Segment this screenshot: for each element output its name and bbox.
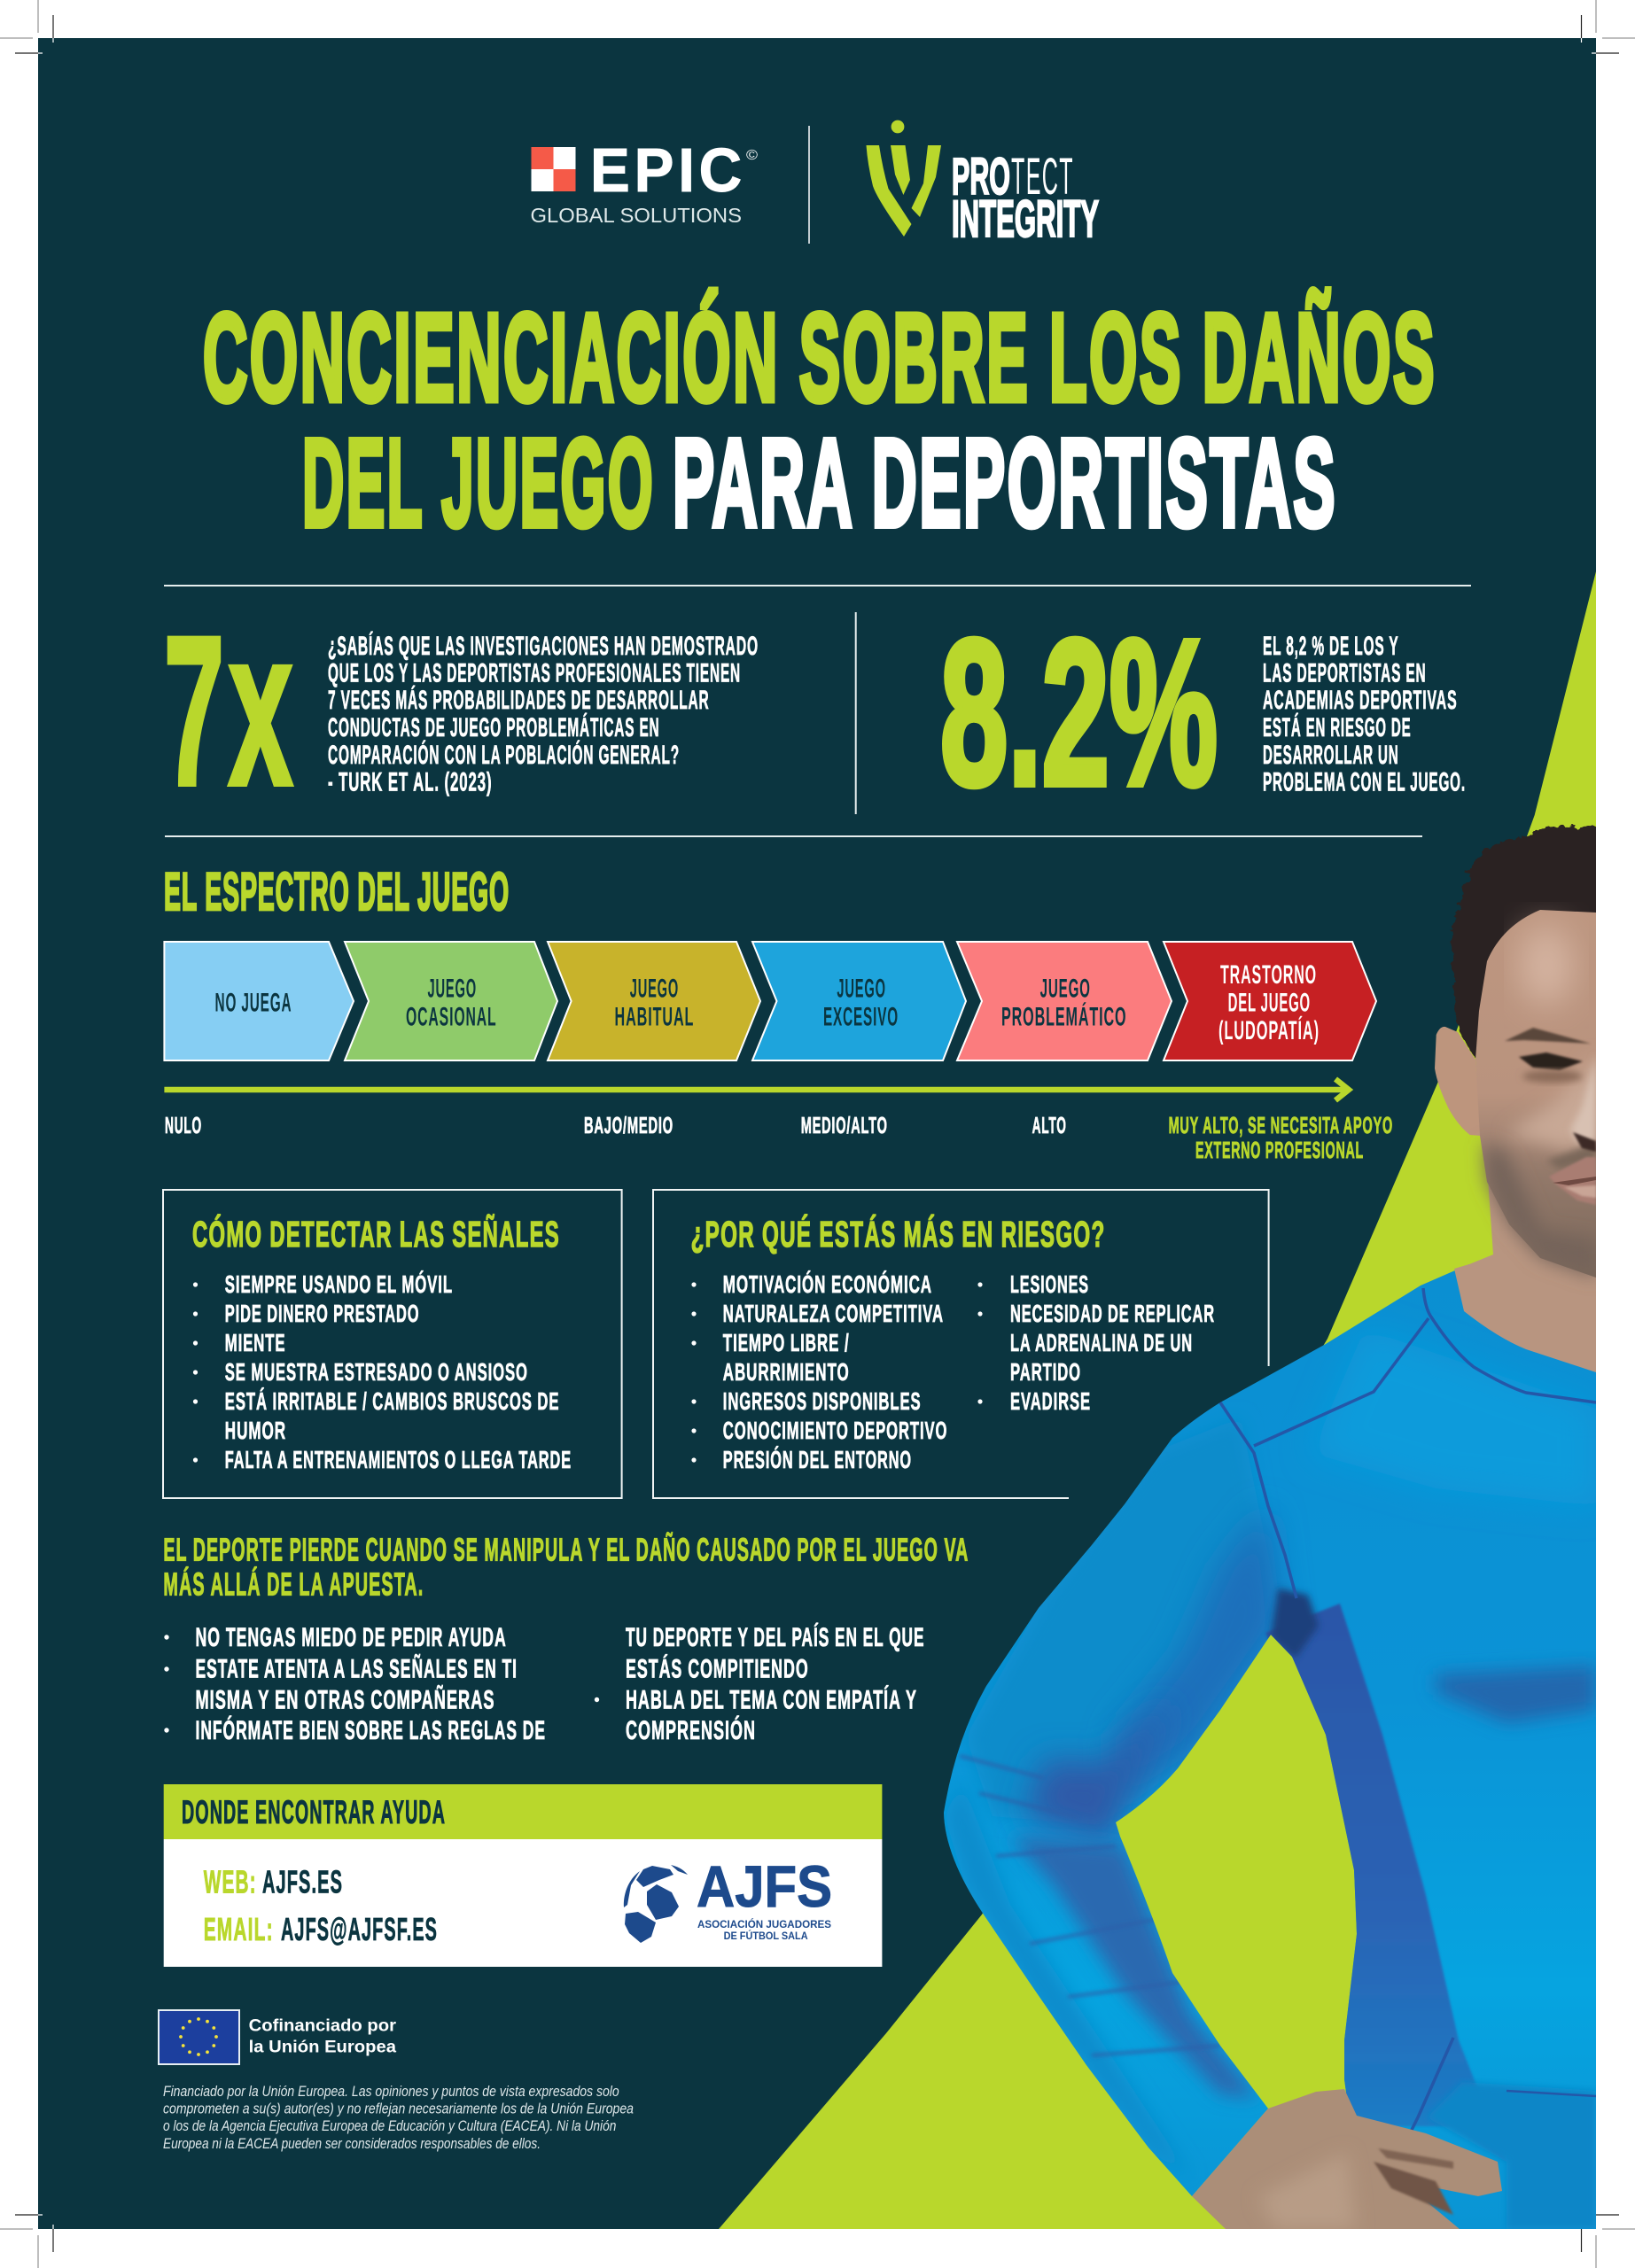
- statement heading: MÁS ALLÁ DE LA APUESTA.: [163, 1566, 424, 1602]
- icon: EPIC red and white square: [532, 147, 576, 191]
- web contact: [204, 1864, 343, 1899]
- bullet list: ESTÁ IRRITABLE / CAMBIOS BRUSCOS DE: [225, 1387, 559, 1415]
- disclaimer: o los de la Agencia Ejecutiva Europea de Educación y Cultura (EACEA). Ni la Unión: [163, 2117, 616, 2134]
- chevron: juego excesivo: [752, 942, 966, 1060]
- advice list: left column: MISMA Y EN OTRAS COMPAÑERAS: [195, 1685, 494, 1715]
- arrow: risk scale: [164, 1079, 1349, 1100]
- bullet list: first column: MOTIVACIÓN ECONÓMICA: [723, 1270, 932, 1298]
- green diagonal background shape: [719, 571, 1596, 2229]
- chevron: trastorno del juego: [1164, 942, 1376, 1060]
- big number 7x: x: [229, 584, 292, 831]
- web contact: AJFS.ES: [262, 1864, 343, 1899]
- EPIC wordmark: EPIC: [590, 136, 746, 205]
- stat description: [328, 631, 759, 797]
- risk level labels: BAJO/MEDIO: [584, 1114, 673, 1138]
- stat description: EL 8,2 % DE LOS Y: [1263, 632, 1398, 661]
- logo: European Union co-funding: [159, 2010, 397, 2064]
- bullet list: second column: [977, 1270, 1215, 1415]
- bullet list: first column: [691, 1270, 947, 1473]
- panel: where to find help: [164, 1784, 882, 1967]
- email contact: [204, 1911, 438, 1947]
- eyebrow: [1505, 1028, 1591, 1044]
- chevron: juego problematico: PROBLEMÁTICO: [1001, 1001, 1127, 1031]
- chevron: no juega: NO JUEGA: [214, 989, 292, 1017]
- statement heading: [163, 1531, 969, 1602]
- chevron: juego excesivo: JUEGO: [837, 975, 886, 1003]
- stat description: [1263, 632, 1466, 797]
- neck: [1454, 1178, 1596, 1372]
- chevron: trastorno del juego: (LUDOPATÍA): [1218, 1015, 1320, 1045]
- chevron: juego ocasional: JUEGO: [427, 975, 477, 1003]
- risk level labels: NULO: [165, 1114, 202, 1138]
- panel heading: DONDE ENCONTRAR AYUDA: [182, 1794, 446, 1830]
- disclaimer: [163, 2083, 634, 2152]
- chevron: juego problematico: [957, 942, 1172, 1060]
- risk level labels: [165, 1114, 1393, 1163]
- disclaimer: comprometen a su(s) autor(es) y no reflejan necesariamente los de la Unión Europea: [163, 2101, 634, 2117]
- logo: AJFS: [624, 1853, 832, 1943]
- shirt seams: [1220, 1288, 1596, 2135]
- chevron: juego ocasional: [345, 942, 557, 1060]
- stat description: COMPARACIÓN CON LA POBLACIÓN GENERAL?: [328, 740, 680, 770]
- co-funding text: la Unión Europea: [249, 2039, 396, 2057]
- bullet list: SIEMPRE USANDO EL MÓVIL: [225, 1270, 453, 1298]
- panel header bar: [164, 1784, 882, 1839]
- email contact: AJFS@AJFSF.ES: [281, 1911, 438, 1947]
- risk level labels: MEDIO/ALTO: [801, 1114, 888, 1138]
- logo: EPIC Global Solutions: [530, 136, 758, 227]
- logo: Protect Integrity: TECT: [1011, 148, 1074, 206]
- copyright mark: ©: [746, 148, 758, 163]
- panel white body: [164, 1839, 882, 1967]
- logo: Protect Integrity: [867, 120, 1099, 248]
- advice list: right column: COMPRENSIÓN: [626, 1715, 756, 1745]
- stat description: DESARROLLAR UN: [1263, 741, 1398, 770]
- stat description: CONDUCTAS DE JUEGO PROBLEMÁTICAS EN: [328, 712, 659, 742]
- advice list: right column: [595, 1622, 925, 1745]
- bullet list: first column: PRESIÓN DEL ENTORNO: [723, 1446, 912, 1473]
- advice list: right column: ESTÁS COMPITIENDO: [626, 1653, 809, 1683]
- hair: [1452, 826, 1608, 1060]
- risk level labels: ALTO: [1032, 1114, 1067, 1138]
- web contact: WEB:: [204, 1864, 257, 1899]
- co-funding text: Cofinanciado por: [249, 2017, 397, 2036]
- bullet list: first column: NATURALEZA COMPETITIVA: [723, 1300, 944, 1327]
- ear: [1435, 1027, 1481, 1136]
- bullet list: second column: LA ADRENALINA DE UN: [1010, 1329, 1193, 1356]
- title: [203, 287, 1436, 553]
- chevron: juego habitual: JUEGO: [630, 975, 679, 1003]
- icon: EU flag: [159, 2010, 239, 2064]
- bullet list: FALTA A ENTRENAMIENTOS O LLEGA TARDE: [225, 1446, 572, 1473]
- face: [1475, 910, 1596, 1278]
- chevron: trastorno del juego: DEL JUEGO: [1228, 989, 1311, 1017]
- advice list: left column: [164, 1623, 546, 1745]
- panel heading: CÓMO DETECTAR LAS SEÑALES: [192, 1214, 560, 1254]
- athlete figure: [944, 826, 1608, 2229]
- advice list: right column: HABLA DEL TEMA CON EMPATÍA Y: [626, 1685, 917, 1715]
- bullet list: MIENTE: [225, 1329, 285, 1356]
- email contact: EMAIL:: [204, 1911, 274, 1947]
- stat description: QUE LOS Y LAS DEPORTISTAS PROFESIONALES TIENEN: [328, 659, 741, 687]
- Protect wordmark: PRO: [952, 148, 1010, 206]
- stat: 7x: [164, 584, 759, 831]
- panel heading: ¿POR QUÉ ESTÁS MÁS EN RIESGO?: [691, 1214, 1106, 1254]
- bullet list: HUMOR: [225, 1417, 286, 1444]
- logo divider: [808, 126, 810, 244]
- stat description: LAS DEPORTISTAS EN: [1263, 659, 1427, 687]
- hand: [1192, 2089, 1502, 2229]
- mouth: [1549, 1157, 1596, 1205]
- Integrity wordmark: INTEGRITY: [952, 190, 1099, 248]
- co-funding text: [249, 2017, 397, 2057]
- big number 7x: 7: [164, 593, 224, 829]
- chevron: trastorno del juego: TRASTORNO: [1220, 960, 1317, 990]
- bullet list: SE MUESTRA ESTRESADO O ANSIOSO: [225, 1358, 528, 1386]
- chevron: juego habitual: HABITUAL: [615, 1003, 694, 1031]
- stat description: ACADEMIAS DEPORTIVAS: [1263, 686, 1457, 715]
- big number 8.2%: 8.2%: [940, 596, 1218, 828]
- advice list: left column: INFÓRMATE BIEN SOBRE LAS REGLAS DE: [195, 1715, 546, 1745]
- advice list: left column: ESTATE ATENTA A LAS SEÑALES EN TI: [195, 1653, 518, 1683]
- text: EL ESPECTRO DEL JUEGO: [164, 862, 510, 921]
- chevron: juego habitual: [548, 942, 760, 1060]
- AJFS wordmark: AJFS: [697, 1853, 832, 1919]
- bullet list: second column: NECESIDAD DE REPLICAR: [1010, 1300, 1215, 1327]
- shirt: [944, 1264, 1596, 2229]
- chevron chart: gambling spectrum: [164, 942, 1376, 1060]
- eye: [1519, 1052, 1583, 1070]
- stat description: - TURK ET AL. (2023): [328, 767, 493, 797]
- disclaimer: Financiado por la Unión Europea. Las opiniones y puntos de vista expresados solo: [163, 2083, 619, 2100]
- disclaimer: Europea ni la EACEA pueden ser considerados responsables de ellos.: [163, 2135, 541, 2152]
- chevron: no juega: [164, 942, 354, 1060]
- Global Solutions wordmark: GLOBAL SOLUTIONS: [530, 204, 742, 227]
- nose: [1570, 1054, 1596, 1143]
- stat description: ¿SABÍAS QUE LAS INVESTIGACIONES HAN DEMOSTRADO: [328, 631, 759, 661]
- statement heading: EL DEPORTE PIERDE CUANDO SE MANIPULA Y EL DAÑO CAUSADO POR EL JUEGO VA: [163, 1531, 969, 1568]
- AJFS full name: DE FÚTBOL SALA: [724, 1929, 808, 1942]
- bullet list: first column: CONOCIMIENTO DEPORTIVO: [723, 1417, 947, 1444]
- panel: why you are at more risk: [653, 1190, 1269, 1498]
- stat description: ESTÁ EN RIESGO DE: [1263, 712, 1411, 742]
- stat description: 7 VECES MÁS PROBABILIDADES DE DESARROLLAR: [328, 685, 709, 715]
- title: DEL JUEGO: [302, 413, 655, 553]
- bullet list: second column: PARTIDO: [1010, 1358, 1081, 1386]
- AJFS full name: [697, 1917, 831, 1942]
- chevron: juego problematico: JUEGO: [1040, 975, 1091, 1003]
- icon: Protect Integrity shield: [867, 120, 941, 237]
- chevron: juego excesivo: EXCESIVO: [823, 1003, 899, 1031]
- bullet list: second column: LESIONES: [1010, 1270, 1089, 1298]
- risk level labels: EXTERNO PROFESIONAL: [1195, 1138, 1364, 1163]
- bullet list: second column: EVADIRSE: [1010, 1387, 1091, 1415]
- bullet list: [193, 1270, 572, 1473]
- risk level labels: MUY ALTO, SE NECESITA APOYO: [1169, 1114, 1393, 1138]
- bullet list: first column: TIEMPO LIBRE /: [723, 1329, 850, 1356]
- panel: how to detect the signs: [163, 1190, 622, 1498]
- advice list: right column: TU DEPORTE Y DEL PAÍS EN EL QUE: [626, 1622, 925, 1652]
- bullet list: first column: INGRESOS DISPONIBLES: [723, 1387, 922, 1415]
- advice list: left column: NO TENGAS MIEDO DE PEDIR AYUDA: [195, 1623, 507, 1652]
- icon: football: [624, 1865, 688, 1943]
- stat: 8.2%: [940, 596, 1466, 828]
- AJFS full name: ASOCIACIÓN JUGADORES: [697, 1917, 831, 1930]
- bullet list: PIDE DINERO PRESTADO: [225, 1300, 420, 1327]
- chevron: juego ocasional: OCASIONAL: [406, 1003, 496, 1031]
- bullet list: first column: ABURRIMIENTO: [723, 1358, 850, 1386]
